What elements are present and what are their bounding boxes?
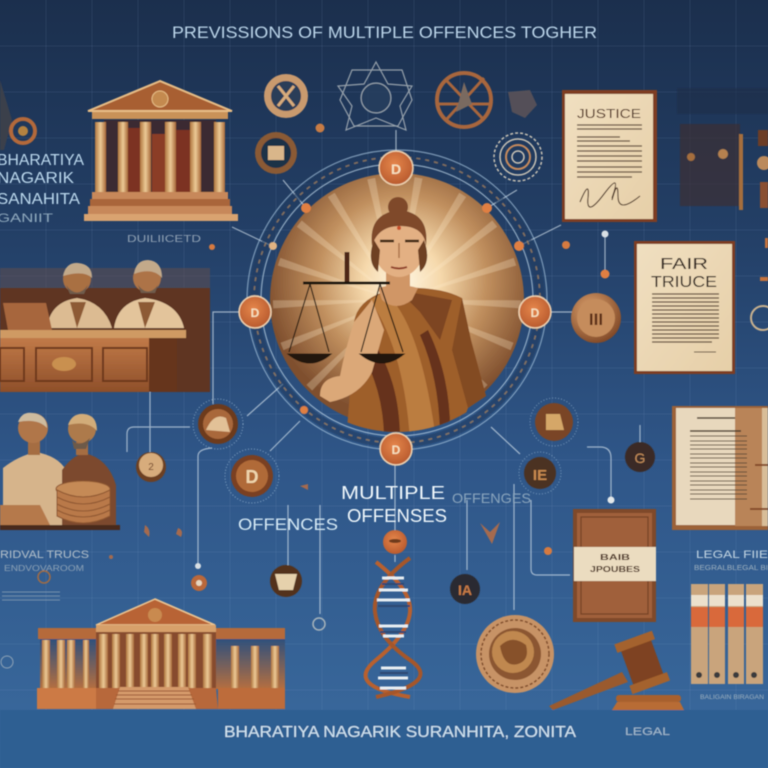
label: Ridval Trucs: RIDVAL TRUCS — [0, 549, 89, 561]
connector dots — [195, 124, 614, 569]
node: bottom D badge — [380, 433, 412, 465]
scattered orange marks — [109, 484, 500, 559]
panel: Justice document: JUSTICE — [577, 107, 641, 121]
label: Legal File: LEGAL FIIE — [696, 549, 768, 561]
label: Legal File — [694, 549, 768, 572]
icon: bronze coin — [571, 293, 621, 343]
coin: right cluster lower: IE — [533, 467, 547, 484]
footer legal label: LEGAL — [625, 726, 670, 738]
sunburst disc — [270, 173, 524, 427]
coin: dark lower: IA — [458, 582, 472, 598]
heading: Multiple Offenses: OFFENSES — [347, 506, 447, 526]
icon: DNA helix — [366, 558, 420, 697]
panel: Fair Trial document: TRIUCE — [651, 274, 717, 291]
icon: dark emblem coin — [255, 132, 297, 174]
node: right D badge: D — [531, 306, 540, 320]
bench desk — [0, 330, 186, 338]
icon: crystal — [508, 90, 537, 118]
icon: laptop — [3, 303, 52, 330]
coin: small: 2 — [148, 462, 154, 473]
icon: bottom courthouse — [37, 599, 285, 709]
panel: right faded court scene — [677, 88, 768, 330]
heading: Multiple Offenses: MULTIPLE — [341, 483, 445, 503]
footer text: BHARATIYA NAGARIK SURANHITA, ZONITA — [224, 724, 576, 741]
coin: tiny — [191, 575, 207, 591]
panel: central justice figure — [247, 150, 547, 450]
coin: lower mid — [270, 565, 302, 597]
panel: Justice document — [562, 90, 657, 222]
coin: right cluster lower — [519, 452, 561, 494]
icon: legal binders — [691, 584, 763, 684]
label: Offences: OFFENCES — [238, 515, 338, 534]
coin: orange top DNA — [383, 530, 407, 554]
icon: bronze coin: III — [589, 310, 603, 329]
label: Ridval Trucs — [0, 549, 89, 668]
coin: small — [136, 452, 166, 482]
coin: right cluster top — [530, 398, 578, 446]
panel: courtroom bench with judges — [0, 260, 210, 392]
title: PREVISSIONS OF MULTIPLE OFFENCES TOGHER — [172, 23, 597, 42]
icon: gavel — [549, 631, 684, 710]
faded label: Offenges: OFFENGES — [452, 490, 531, 506]
outer rings — [247, 150, 547, 450]
coin: dark lower — [450, 574, 480, 604]
label: Bharatiya Nagarik Sanahita — [0, 152, 85, 225]
node: top D badge: D — [391, 161, 401, 177]
panel: left edge ornament — [0, 80, 35, 150]
icon: bronze medal — [476, 615, 554, 693]
icon: spiral coin — [494, 133, 542, 181]
small faded label: DUILIICETD — [127, 234, 201, 245]
coin: D emblem: D — [246, 467, 258, 487]
panel: Fair Trial document: FAIR — [660, 256, 708, 273]
node: top D badge — [379, 151, 413, 185]
coin: faded ring — [313, 618, 325, 630]
node: right D badge — [519, 296, 551, 328]
judge right — [114, 260, 184, 328]
icon: star mandala — [338, 62, 412, 130]
baseline and footer band — [0, 710, 768, 768]
coin: dark right — [625, 442, 655, 472]
small caption under binders: BALIGAIN BIRAGAN — [700, 695, 764, 701]
judge left — [47, 263, 112, 328]
heading: Multiple Offenses — [341, 483, 447, 526]
coin: dark right: G — [635, 450, 645, 466]
node: left D badge: D — [251, 306, 260, 320]
panel: Fair Trial document — [634, 241, 735, 374]
coin: left cluster — [193, 399, 243, 449]
label: Legal File: BEGRALBLEGAL BI — [694, 565, 768, 572]
icon: scales of justice — [288, 252, 404, 363]
panel: second judges with stack of plates — [0, 413, 120, 530]
icon: crossed coin — [264, 74, 308, 118]
sun rays — [273, 177, 521, 391]
icon: closed book with band — [573, 509, 656, 622]
icon: closed book with band: JPOUBES — [590, 564, 640, 574]
node: bottom D badge: D — [392, 443, 401, 457]
figure — [320, 197, 486, 440]
coin: D emblem — [225, 449, 279, 503]
node coins — [136, 398, 655, 630]
icon: wheel — [437, 73, 491, 127]
icon: closed book with band: BAIB — [600, 552, 630, 562]
node: left D badge — [239, 296, 271, 328]
label: Ridval Trucs: ENDVOVAROOM — [4, 564, 84, 573]
connector lines — [127, 130, 640, 614]
icon: open book — [672, 406, 768, 530]
icon: top temple — [84, 81, 238, 221]
